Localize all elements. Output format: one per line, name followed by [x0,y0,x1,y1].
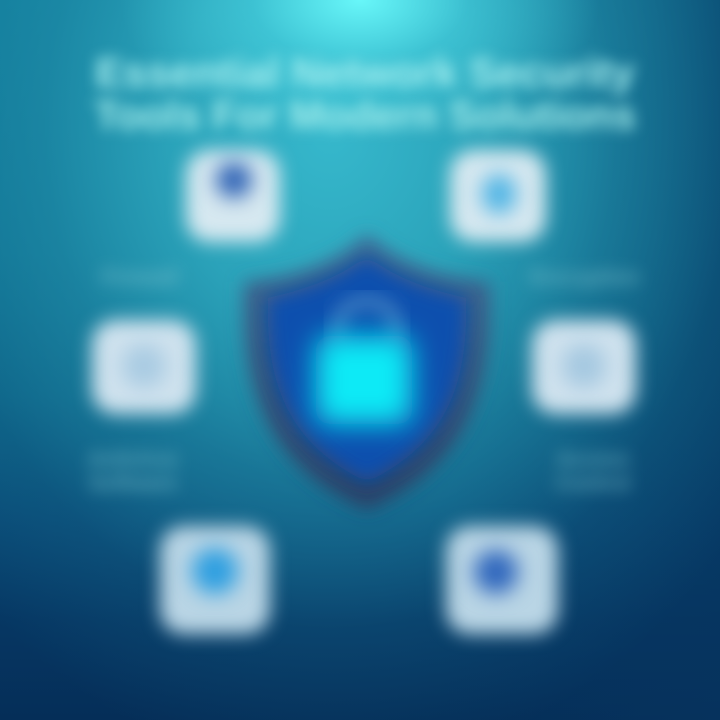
caption: upper right: Encryption [530,266,640,289]
icon card: bottom left [146,512,284,648]
title line 2: Tools For Modern Solutions [94,92,636,138]
padlock [316,301,412,424]
icon card: top right [436,136,560,256]
caption: lower right: Access [556,448,630,471]
caption: upper left: Firewall [101,266,179,289]
shield outer rim [244,234,490,510]
title line 1: Essential Network Security [95,49,635,96]
icon card: middle left [78,306,210,428]
caption: lower left [86,448,179,496]
shield inner face [268,256,466,482]
caption: lower right: Control [556,472,630,495]
shield with padlock [234,228,499,516]
caption: lower left: Antivirus [87,448,178,471]
title [88,49,642,138]
icon card: top left [172,136,294,256]
icon card: bottom right [432,512,572,648]
caption: lower left: Software [89,472,177,495]
icon card: middle right [518,306,650,428]
caption: lower right [554,448,634,496]
padlock shackle [338,301,396,345]
padlock body [316,336,412,424]
